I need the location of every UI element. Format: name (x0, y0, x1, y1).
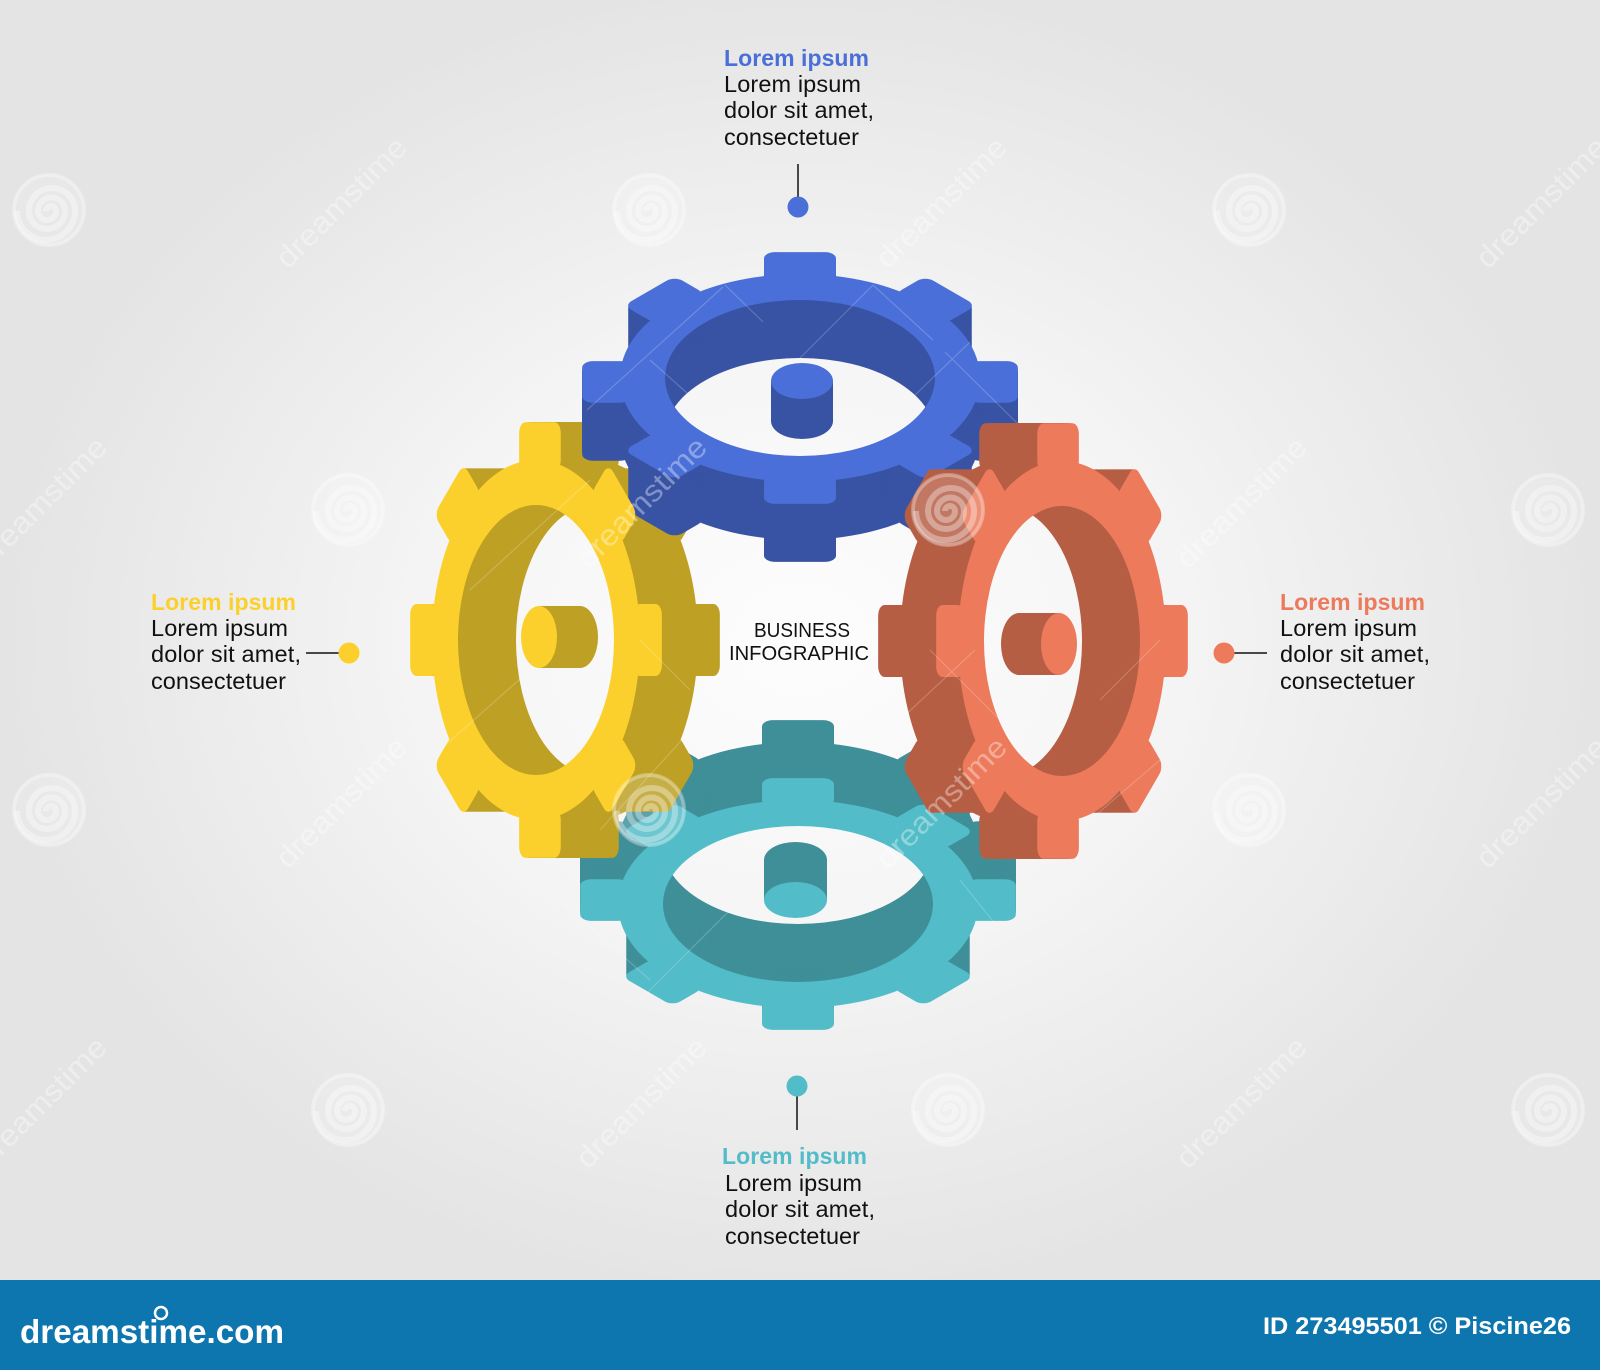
callout: left: Lorem ipsum (151, 589, 296, 615)
footer banner (0, 1280, 1600, 1370)
watermark text: dreamstime (570, 1031, 714, 1175)
gear: red (right) (878, 423, 1188, 859)
center label: INFOGRAPHIC (729, 642, 869, 665)
watermark text: dreamstime (1470, 131, 1600, 275)
gear: yellow extrusion (left) (412, 422, 720, 858)
gear: teal (bottom) (580, 720, 1016, 1030)
callout: bottom: Lorem ipsum (722, 1143, 867, 1169)
gear: yellow front face and hub (410, 422, 662, 858)
teal gear hub (764, 842, 827, 918)
center label: BUSINESS (754, 619, 850, 642)
blue gear front face (582, 252, 1018, 504)
footer image id and credit: ID 273495501 © Piscine26 (1263, 1313, 1571, 1340)
callout: right (1214, 589, 1430, 694)
watermark spirals (13, 174, 1584, 1146)
red gear extrusion (878, 423, 1186, 859)
callout: right: dolor sit amet, (1280, 641, 1430, 667)
callout: left: dolor sit amet, (151, 641, 301, 667)
callout: bottom: Lorem ipsum (725, 1170, 862, 1196)
watermark text: dreamstime (1470, 731, 1600, 875)
callout: right: Lorem ipsum (1280, 615, 1417, 641)
callout: bottom (722, 1076, 875, 1249)
callout: bottom: dolor sit amet, (725, 1196, 875, 1222)
watermark text (0, 131, 1600, 1175)
teal gear extrusion (580, 720, 1016, 1028)
red gear hub (1001, 613, 1077, 675)
watermark text: dreamstime (1170, 1031, 1314, 1175)
callout: top: dolor sit amet, (724, 97, 874, 123)
teal gear front face (580, 778, 1016, 1030)
callout: top: Lorem ipsum (724, 71, 861, 97)
yellow gear hub (521, 606, 598, 668)
callout: left: consectetuer (151, 668, 286, 694)
watermark text: dreamstime (570, 431, 714, 575)
watermark text: dreamstime (870, 131, 1014, 275)
yellow gear front face (410, 422, 662, 858)
blue gear hub (771, 363, 833, 439)
watermark text: dreamstime (1170, 431, 1314, 575)
callout: top: consectetuer (724, 124, 859, 150)
callout: right: consectetuer (1280, 668, 1415, 694)
center label (729, 619, 869, 665)
watermark text: dreamstime (870, 731, 1014, 875)
callout: left (151, 589, 360, 694)
callout: right: Lorem ipsum (1280, 589, 1425, 615)
footer logo: dreamstime.com (20, 1313, 284, 1350)
watermark text: dreamstime (270, 131, 414, 275)
blue gear extrusion (582, 254, 1018, 562)
gear: blue (top) (582, 252, 1018, 562)
callout: bottom: consectetuer (725, 1223, 860, 1249)
watermark text: dreamstime (270, 731, 414, 875)
callout: top: Lorem ipsum (724, 45, 869, 71)
callout: top (724, 45, 874, 218)
red gear front face (936, 423, 1188, 859)
callout: left: Lorem ipsum (151, 615, 288, 641)
